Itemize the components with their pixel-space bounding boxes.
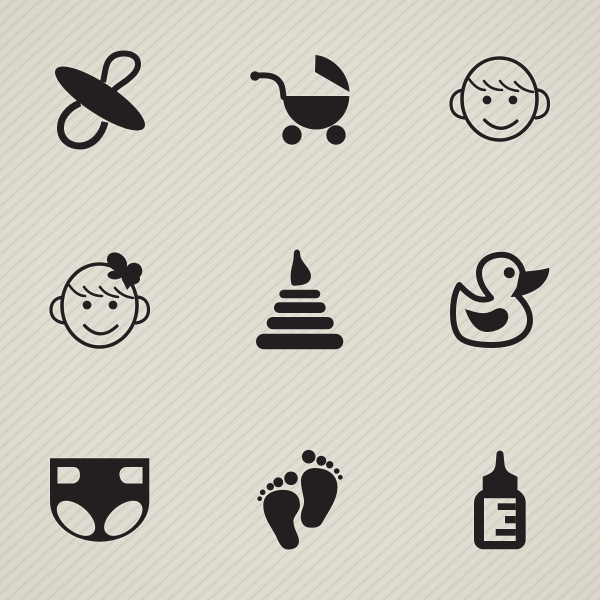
icon: baby boy face — [451, 58, 548, 140]
icon: baby footprints — [257, 450, 343, 550]
icon: rubber duck — [453, 255, 549, 345]
icon: stacking ring pyramid toy — [256, 250, 343, 349]
icon: baby stroller — [250, 55, 350, 145]
icon: diaper — [50, 458, 149, 542]
icon: baby bottle — [474, 451, 526, 549]
icon: baby girl face — [51, 248, 148, 347]
icon: pacifier — [47, 54, 153, 146]
